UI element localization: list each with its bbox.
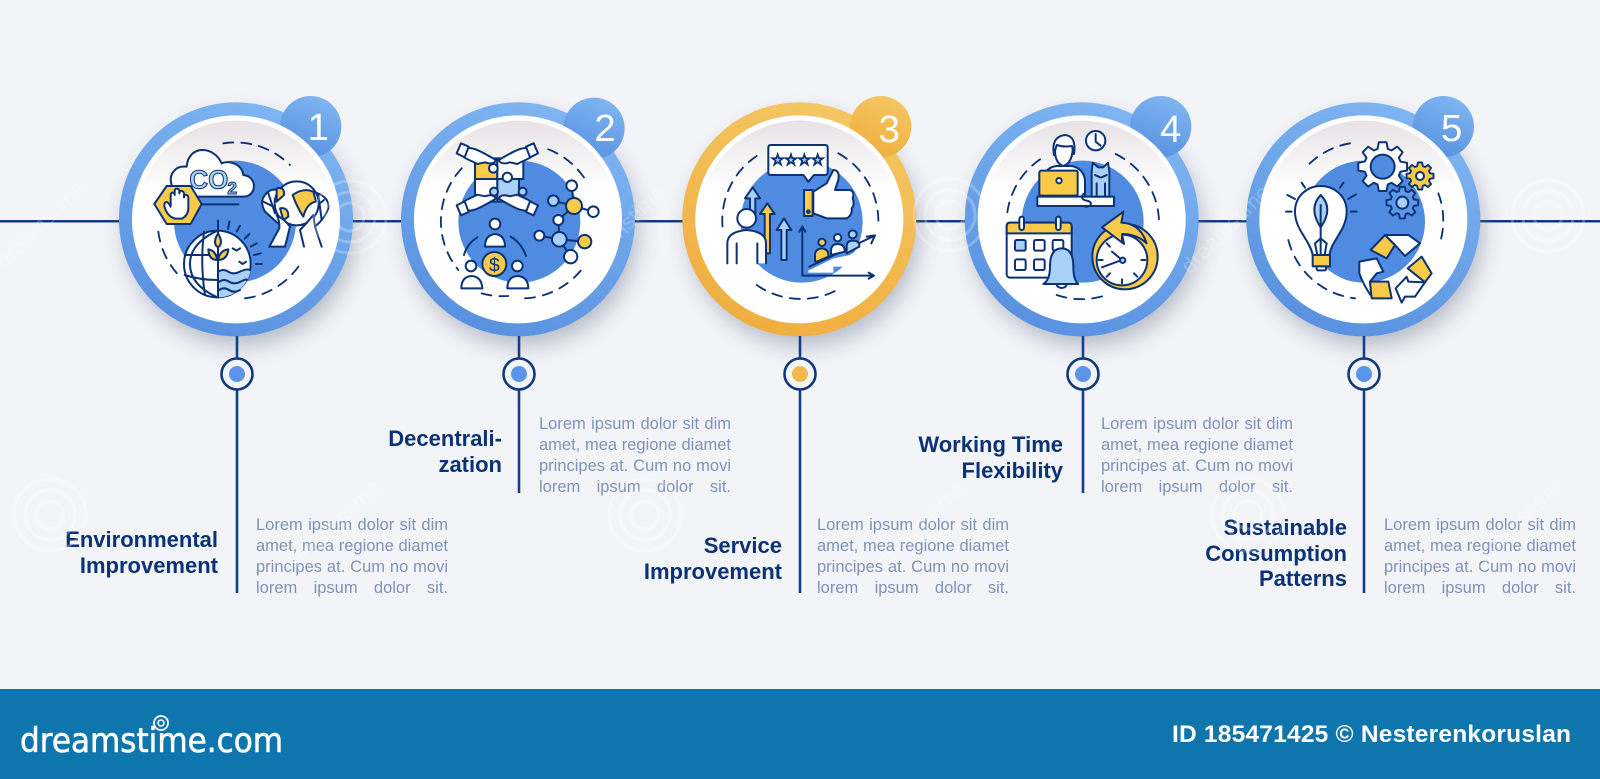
text block 2: Lorem ipsum dolor sit dim — [539, 415, 731, 433]
icon: gears — [1358, 142, 1434, 218]
text block 5: amet, mea regione diamet — [1384, 537, 1576, 555]
text block 1 — [256, 516, 448, 597]
icon: stop hand hexagon — [154, 186, 202, 224]
text block 5 — [1384, 516, 1576, 597]
icon: molecule network — [534, 180, 599, 263]
step 4: working time flexibility circle — [965, 96, 1201, 346]
icon: person at laptop with clock — [1037, 131, 1114, 206]
text block 2: principes at. Cum no movi — [539, 457, 731, 475]
icon: CO2 cloud: 2 — [227, 178, 237, 198]
watermark overlay: dreamstime — [286, 475, 385, 574]
logo: dreamstime.com: dreamstime.com — [20, 721, 283, 761]
icon: hands holding earth — [262, 181, 328, 247]
text block 4: Lorem ipsum dolor sit dim — [1101, 415, 1293, 433]
connector 1 — [222, 336, 252, 593]
heading: working time flexibility — [918, 432, 1063, 483]
icon: recycling arrows — [1359, 235, 1432, 303]
badge 4 — [1130, 96, 1191, 157]
icon: leaf light bulb — [1286, 183, 1357, 270]
icon: CO2 cloud: CO — [189, 164, 228, 194]
step 1: environmental improvement circle — [119, 96, 356, 346]
connector 4 — [1068, 336, 1098, 493]
badge 5 — [1413, 96, 1474, 157]
heading: environmental improvement — [65, 527, 218, 578]
icon: CO2 cloud — [171, 150, 254, 204]
heading: decentralization: zation — [438, 452, 502, 477]
icon: person with growth arrows — [727, 187, 791, 263]
heading: decentralization: Decentrali- — [388, 426, 502, 451]
icon: cat — [1082, 163, 1109, 207]
footer bar — [0, 689, 1600, 779]
step 2: decentralization circle — [401, 98, 638, 346]
connector 5 — [1348, 336, 1380, 593]
heading: environmental improvement: Improvement — [80, 553, 218, 578]
icon: team growth chart — [799, 227, 875, 279]
icon: people with dollar — [461, 219, 528, 288]
connector 3 — [784, 336, 816, 593]
heading: sustainable consumption patterns: Consumption — [1205, 540, 1347, 566]
image id and author credit: ID 185471425 © Nesterenkoruslan — [1172, 721, 1571, 748]
badge 5: 5 — [1441, 107, 1462, 150]
text block 2 — [539, 415, 731, 496]
text block 2: amet, mea regione diamet — [539, 436, 731, 454]
icon: thumbs up — [804, 170, 854, 218]
step 5: sustainable consumption patterns circle — [1246, 96, 1483, 346]
watermark overlay: dreamstime — [871, 475, 970, 574]
connector 2 — [504, 336, 534, 493]
icon: people with dollar: $ — [489, 255, 500, 276]
heading: working time flexibility: Working Time — [918, 432, 1063, 457]
heading: service improvement: Improvement — [644, 559, 782, 584]
badge 3: 3 — [879, 108, 900, 151]
badge 2 — [563, 98, 625, 159]
heading: decentralization — [388, 426, 502, 477]
text block 4 — [1101, 415, 1293, 496]
heading: environmental improvement: Environmental — [65, 527, 218, 552]
text block 1: lorem ipsum dolor sit. — [256, 579, 448, 597]
text block 4: lorem ipsum dolor sit. — [1101, 478, 1293, 496]
text block 3: Lorem ipsum dolor sit dim — [817, 516, 1009, 534]
heading: sustainable consumption patterns: Patterns — [1259, 566, 1347, 591]
icon: stopwatch with return arrow — [1092, 212, 1158, 289]
heading: service improvement — [644, 533, 782, 584]
text block 4: principes at. Cum no movi — [1101, 457, 1293, 475]
icon: rating speech bubble — [768, 145, 828, 182]
badge 4: 4 — [1160, 108, 1181, 151]
watermark overlay: dreamstime — [571, 180, 670, 279]
watermark overlay: dreamstime — [1176, 180, 1275, 279]
text block 3: lorem ipsum dolor sit. — [817, 579, 1009, 597]
icon: calendar with bell — [1007, 217, 1078, 288]
badge 1: 1 — [308, 106, 329, 149]
heading: service improvement: Service — [704, 533, 782, 558]
step 3: service improvement circle — [682, 96, 919, 346]
text block 3: principes at. Cum no movi — [817, 558, 1009, 576]
heading: working time flexibility: Flexibility — [962, 458, 1063, 483]
text block 1: Lorem ipsum dolor sit dim — [256, 516, 448, 534]
icon: puzzle with hands — [457, 143, 538, 215]
text block 3: amet, mea regione diamet — [817, 537, 1009, 555]
text block 2: lorem ipsum dolor sit. — [539, 478, 731, 496]
text block 5: Lorem ipsum dolor sit dim — [1384, 516, 1576, 534]
watermark overlay: dreamstime — [1466, 475, 1565, 574]
heading: sustainable consumption patterns — [1205, 515, 1347, 591]
text block 1: principes at. Cum no movi — [256, 558, 448, 576]
text block 1: amet, mea regione diamet — [256, 537, 448, 555]
text block 4: amet, mea regione diamet — [1101, 436, 1293, 454]
icon: plant and water globe — [184, 221, 262, 297]
badge 3 — [850, 96, 911, 157]
text block 5: principes at. Cum no movi — [1384, 558, 1576, 576]
heading: sustainable consumption patterns: Sustainable — [1224, 515, 1347, 540]
badge 2: 2 — [594, 107, 616, 150]
text block 3 — [817, 516, 1009, 597]
text block 5: lorem ipsum dolor sit. — [1384, 579, 1576, 597]
badge 1 — [280, 96, 341, 157]
horizontal timeline line — [0, 220, 1600, 222]
